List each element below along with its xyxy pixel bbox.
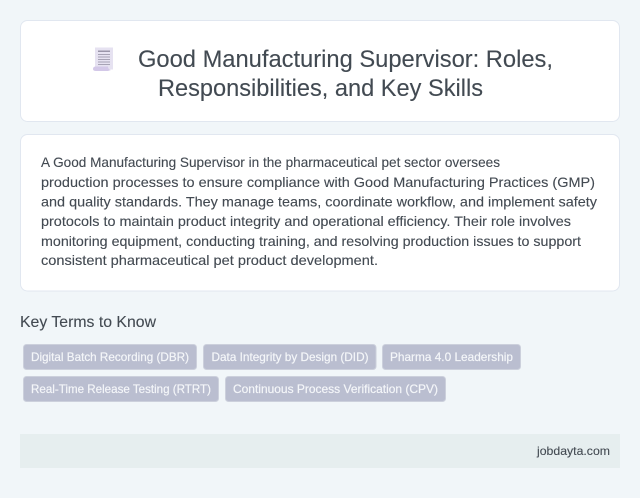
title: Good Manufacturing Supervisor: Roles, xyxy=(138,46,553,73)
tag: CPV xyxy=(226,376,446,402)
icon: document scroll xyxy=(93,48,113,71)
tag: RTRT: Real-Time Release Testing (RTRT) xyxy=(31,382,211,396)
panel: description xyxy=(20,134,620,291)
tags: key terms xyxy=(24,344,520,402)
tag: CPV: Continuous Process Verification (CPV) xyxy=(233,382,438,396)
heading: key terms: Key Terms to Know xyxy=(20,314,156,331)
tag: RTRT xyxy=(24,376,218,402)
title: Responsibilities, and Key Skills xyxy=(158,75,483,102)
tag: Pharma 4.0 xyxy=(382,344,520,370)
text block: description xyxy=(41,154,597,268)
text block: description: A Good Manufacturing Supervisor in the pharmaceutical pet sector oversees xyxy=(41,154,500,170)
text block: description: production processes to ensure compliance with Good Manufacturing Practices (GMP) xyxy=(41,174,595,190)
text block: description: protocols to maintain product integrity and operational efficiency. Their role involves xyxy=(41,213,571,229)
text block: description: consistent pharmaceutical pet product development. xyxy=(41,252,378,268)
footer source: jobdayta.com xyxy=(536,444,610,458)
tag: DID xyxy=(204,344,376,370)
text block: description: and quality standards. They manage teams, coordinate workflow, and implement safety xyxy=(41,194,597,210)
title xyxy=(138,46,553,102)
text block: description: monitoring equipment, conducting training, and resolving production issues to support xyxy=(41,233,581,249)
tag: Pharma 4.0: Pharma 4.0 Leadership xyxy=(390,350,513,364)
tag: DBR xyxy=(24,344,196,370)
tag: DBR: Digital Batch Recording (DBR) xyxy=(31,350,189,364)
panel: title card xyxy=(20,20,620,122)
footer xyxy=(20,434,620,468)
tag: DID: Data Integrity by Design (DID) xyxy=(212,350,368,364)
